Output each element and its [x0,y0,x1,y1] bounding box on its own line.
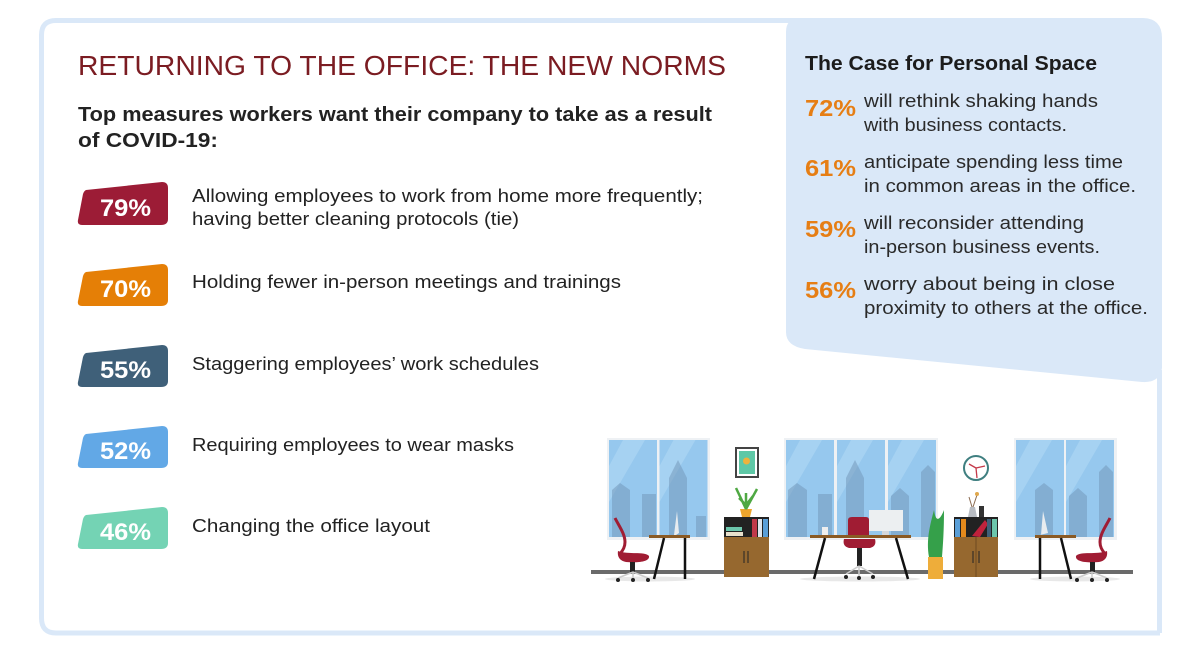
left chair [615,518,650,582]
stat: 61% [805,152,1136,196]
stat: 61%: 61% [805,155,856,181]
measure: 52%: Requiring employees to wear masks [192,435,514,455]
measure: 70%: 70% [100,276,151,303]
panel heading: The Case for Personal Space [805,53,1097,75]
right chair [1075,518,1110,582]
office illustration [591,438,1133,582]
panel: the case for personal space [786,18,1162,382]
right cabinet with vase [954,492,998,577]
stat: 56%: 56% [805,277,856,303]
subheading: of COVID-19: [78,130,218,152]
subheading [78,104,712,152]
measure: 55%: Staggering employees’ work schedules [192,354,539,374]
measure: 79%: 79% [100,195,151,222]
measure: 70%: Holding fewer in-person meetings and trainings [192,272,621,292]
measure: 55%: 55% [100,357,151,384]
stat: 56%: worry about being in close [863,274,1115,294]
tall potted plant [928,510,944,579]
measure: 52%: 52% [100,438,151,465]
title: RETURNING TO THE OFFICE: THE NEW NORMS [78,50,726,81]
right desk [1035,511,1076,579]
left cabinet with plant [724,488,769,577]
centre window [784,438,938,540]
measure: 46%: Changing the office layout [192,516,430,536]
stat: 72%: will rethink shaking hands [863,91,1098,111]
stat: 72% [805,91,1098,135]
stat: 72%: with business contacts. [863,115,1067,135]
measure: 55% [78,345,539,387]
measure: 46% [78,507,430,549]
stat: 61%: anticipate spending less time [864,152,1123,172]
stat: 61%: in common areas in the office. [864,176,1136,196]
stat: 59%: in-person business events. [864,237,1100,257]
measure: 70% [78,264,621,306]
left window [607,438,710,540]
measure: 46%: 46% [100,519,151,546]
stat: 59%: will reconsider attending [863,213,1084,233]
measure: 79%: Allowing employees to work from home more frequently; [192,186,703,206]
stat: 59%: 59% [805,216,856,242]
stat: 56%: proximity to others at the office. [864,298,1148,318]
floor line [591,570,1133,574]
wall picture [736,448,758,477]
subheading: Top measures workers want their company to take as a result [78,104,712,126]
stat: 56% [805,274,1148,318]
measure: 52% [78,426,514,468]
wall clock [964,456,988,480]
measure: 79%: having better cleaning protocols (tie) [192,209,519,229]
left desk [649,511,690,579]
centre desk [810,510,911,580]
right window [1014,438,1117,540]
stat: 72%: 72% [805,95,856,121]
measure: 79% [78,182,703,229]
stat: 59% [805,213,1100,257]
